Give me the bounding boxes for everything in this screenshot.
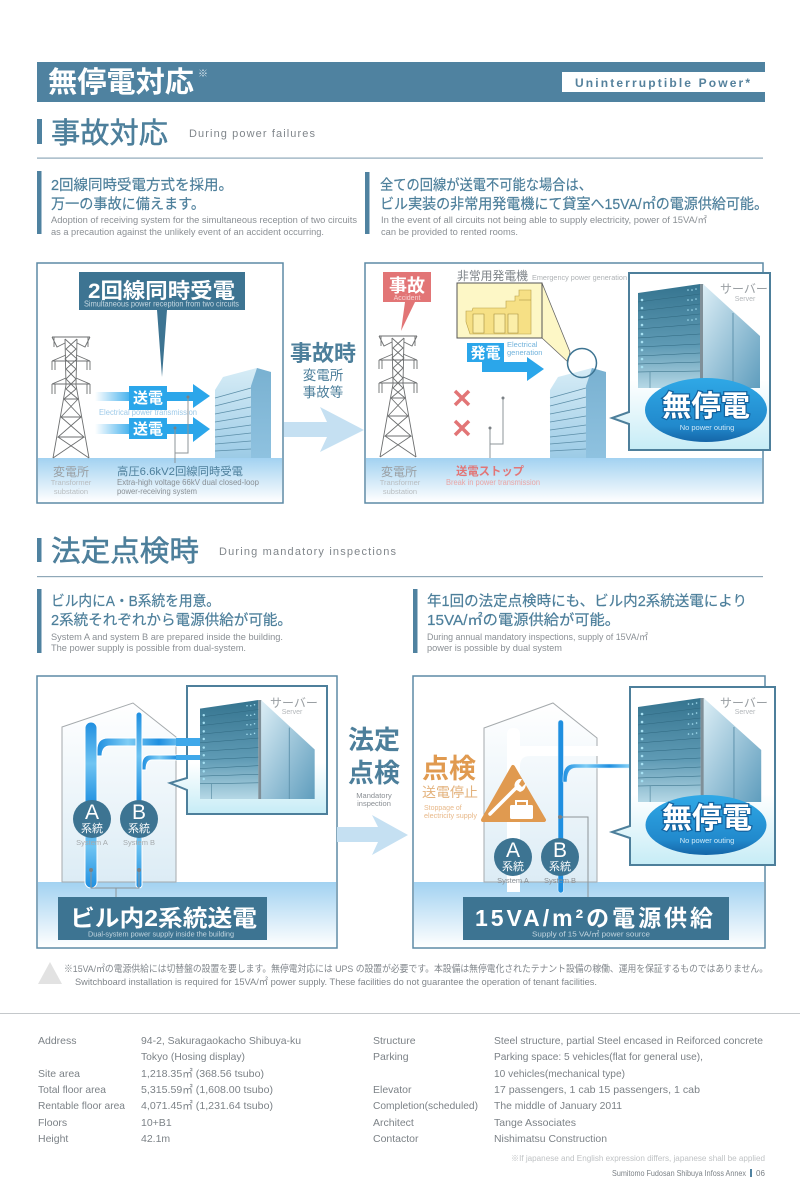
label: server: Server xyxy=(282,709,303,716)
spec table: left column: Height xyxy=(38,1133,68,1145)
panel: server xyxy=(170,686,327,814)
label: inspection: 送電停止 xyxy=(422,785,478,800)
icon: transmission tower xyxy=(52,337,90,458)
label: transformer substation xyxy=(51,464,92,496)
label: server: サーバー xyxy=(270,696,318,710)
spec table: right column: The middle of January 2011 xyxy=(494,1100,622,1112)
spec table: right column: Architect xyxy=(373,1117,414,1129)
badge: system A: 系統 xyxy=(502,859,524,873)
icon: generator zoom box xyxy=(457,283,570,362)
label: break in transmission: 送電ストップ xyxy=(456,464,524,478)
badge: system A: System A xyxy=(76,838,108,847)
callout: simultaneous reception xyxy=(79,272,245,377)
text block: two circuit reception: as a precaution against the unlikely event of an accident occurring. xyxy=(51,227,324,237)
connector lines xyxy=(488,396,504,458)
footer notes: Sumitomo Fudosan Shibuya Infoss Annex xyxy=(612,1169,746,1178)
spec table: right column: Contactor xyxy=(373,1133,419,1145)
spec table: right column: Completion(scheduled) xyxy=(373,1100,478,1112)
label: inspection: electricity supply xyxy=(424,813,478,820)
text block: emergency generator supply: can be provided to rented rooms. xyxy=(381,227,518,237)
arrow: generated power: 発電 xyxy=(470,344,501,362)
banner: 15VA power supply xyxy=(463,897,729,940)
label: inspection xyxy=(422,754,478,820)
spec table: left column: 94-2, Sakuragaokacho Shibuya-ku xyxy=(141,1035,301,1047)
spec table: left column: 42.1m xyxy=(141,1133,170,1145)
spec table: right column: Parking space: 5 vehicles(flat for general use), xyxy=(494,1051,703,1063)
spec table: left column: Tokyo (Hosing display) xyxy=(141,1051,245,1063)
panel: accident, emergency generation xyxy=(365,263,770,503)
badge: no power outage: No power outing xyxy=(680,423,734,432)
label: high voltage system xyxy=(117,464,260,496)
connector lines xyxy=(89,868,141,897)
English title tag: Uninterruptible Power* xyxy=(575,76,750,90)
callout: accident xyxy=(383,272,431,331)
text block: two circuit reception: 万一の事故に備えます。 xyxy=(51,196,205,213)
section heading: during power failures xyxy=(37,117,763,159)
arrow with label: mandatory inspection: Mandatory xyxy=(356,791,392,800)
banner: dual-system supply: ビル内2系統送電 xyxy=(70,905,257,931)
callout: accident: Accident xyxy=(394,295,420,302)
icon: transmission tower xyxy=(379,336,417,457)
label: inspection: 点検 xyxy=(422,754,476,784)
callout: simultaneous reception: Simultaneous power reception from two circuits xyxy=(84,300,239,308)
badge: system B: System B xyxy=(123,838,155,847)
spec table: left column: Address xyxy=(38,1035,77,1047)
arrow with label: at time of accident: 事故時 xyxy=(290,341,356,366)
icon: inspection warning triangle xyxy=(483,767,544,820)
panel: dual-system supply inside building xyxy=(37,676,337,948)
title text: 無停電対応 xyxy=(48,66,194,99)
panel: server, no power outage xyxy=(612,687,775,865)
text block: two circuit reception xyxy=(37,171,358,237)
badge: system A xyxy=(73,800,111,847)
text block: annual inspection supply: During annual mandatory inspections, supply of 15VA/㎡ xyxy=(427,632,648,642)
label: emergency power generator: Emergency power generation xyxy=(532,273,627,282)
icon: building xyxy=(215,368,271,458)
arrow: transmission upper xyxy=(95,384,210,410)
title note mark: ※ xyxy=(198,69,208,80)
label: transformer substation: substation xyxy=(383,487,417,496)
text block: annual inspection supply: 年1回の法定点検時にも、ビル内2系統送電により xyxy=(427,593,747,610)
badge: no power outage: No power outing xyxy=(680,836,734,845)
arrow: transmission upper: 送電 xyxy=(133,390,163,407)
icon: server rack xyxy=(200,700,315,799)
badge: no power outage: 無停電 xyxy=(662,390,750,423)
label: transformer substation xyxy=(380,464,421,496)
text block: emergency generator supply: In the event of all circuits not being able to supply electricity, power of 15VA/㎡ xyxy=(381,215,707,225)
spec table: left column: Rentable floor area xyxy=(38,1100,125,1112)
divider xyxy=(0,1013,800,1014)
power line: active system B xyxy=(558,720,640,893)
badge: system B: B xyxy=(132,801,146,824)
text block: two circuit reception: 2回線同時受電方式を採用。 xyxy=(51,177,233,194)
banner: 15VA power supply: 15VA/m²の電源供給 xyxy=(475,905,713,931)
label: electrical power transmission: Electrical power transmission xyxy=(99,408,197,417)
label: high voltage system: 高圧6.6kV2回線同時受電 xyxy=(117,464,243,478)
spec table: right column: Tange Associates xyxy=(494,1117,576,1129)
badge: no power outage: 無停電 xyxy=(662,802,752,835)
label: server: サーバー xyxy=(720,696,768,710)
panel: 15VA supply during inspection xyxy=(413,676,775,948)
label: transformer substation: 変電所 xyxy=(381,464,417,479)
power lines: system A xyxy=(85,722,200,888)
callout: accident: 事故 xyxy=(389,276,425,296)
text block: emergency generator supply xyxy=(365,172,768,237)
footnote with warning icon xyxy=(38,962,768,988)
label: high voltage system: Extra-high voltage 66kV dual closed-loop xyxy=(117,478,260,487)
spec table: left column: 10+B1 xyxy=(141,1117,172,1129)
label: emergency power generator: 非常用発電機 xyxy=(457,269,528,283)
icon: zoom circle xyxy=(568,348,596,378)
arrow with label: mandatory inspection xyxy=(337,725,408,855)
spec table: right column: 17 passengers, 1 cab 15 passengers, 1 cab xyxy=(494,1084,700,1096)
arrow: transmission lower xyxy=(95,417,210,442)
badge: system B xyxy=(541,838,579,885)
label: break in transmission: Break in power transmission xyxy=(446,478,540,487)
arrow with label: at time of accident: 事故等 xyxy=(303,384,343,400)
section heading: during mandatory inspections: During mandatory inspections xyxy=(219,546,396,558)
section heading: during mandatory inspections xyxy=(37,535,763,577)
text block: emergency generator supply: ビル実装の非常用発電機にて貸室へ15VA/㎡の電源供給可能。 xyxy=(380,196,768,213)
arrow with label: mandatory inspection: 点検 xyxy=(348,758,400,788)
text block: emergency generator supply: 全ての回線が送電不可能な場合は、 xyxy=(380,177,592,194)
footnote with warning icon: Switchboard installation is required for 15VA/㎡ power supply. These facilities do not guarantee the operation of tenant facilities. xyxy=(75,977,597,988)
banner: dual-system supply: Dual-system power supply inside the building xyxy=(88,930,234,938)
connector lines xyxy=(558,815,588,897)
English title tag xyxy=(562,72,765,92)
text block: annual inspection supply: 15VA/㎡の電源供給が可能。 xyxy=(427,612,620,629)
badge: system A: A xyxy=(506,839,520,862)
badge: system B: System B xyxy=(544,876,576,885)
label: high voltage system: power-receiving system xyxy=(117,487,197,496)
label: server xyxy=(720,282,768,303)
badge: system A: System A xyxy=(497,876,529,885)
badge: no power outage xyxy=(645,378,767,442)
footer notes: 06 xyxy=(756,1169,765,1178)
arrow: generated power xyxy=(467,340,544,381)
arrow with label: mandatory inspection: 法定 xyxy=(348,725,400,755)
badge: system B: 系統 xyxy=(549,859,571,873)
spec table: right column: Steel structure, partial Steel encased in Reiforced concrete xyxy=(494,1035,763,1047)
title banner xyxy=(37,62,765,102)
text block: annual inspection supply xyxy=(413,589,747,653)
spec table: right column: Nishimatsu Construction xyxy=(494,1133,607,1145)
icon: server rack xyxy=(638,284,760,388)
footer notes xyxy=(511,1154,765,1178)
text block: annual inspection supply: power is possible by dual system xyxy=(427,643,562,653)
label: server: Server xyxy=(735,709,756,716)
spec table: right column: Elevator xyxy=(373,1084,412,1096)
spec table: right column: Structure xyxy=(373,1035,416,1047)
text block: systems A and B: 2系統それぞれから電源供給が可能。 xyxy=(51,612,292,629)
badge: system B: B xyxy=(553,839,567,862)
spec table: right column: Parking xyxy=(373,1051,409,1063)
icon: cross upper xyxy=(455,391,469,405)
label: emergency power generator xyxy=(457,269,627,283)
spec table: left column xyxy=(38,1035,301,1145)
footer notes: ※If japanese and English expression differs, japanese shall be applied xyxy=(511,1154,765,1163)
label: inspection: Stoppage of xyxy=(424,805,462,812)
icon: building xyxy=(550,368,606,458)
label: transformer substation: Transformer xyxy=(380,478,421,487)
power line: stopped system A xyxy=(507,728,628,892)
section heading: during power failures: During power failures xyxy=(189,128,316,140)
spec table: left column: 1,218.35㎡ (368.56 tsubo) xyxy=(141,1068,264,1080)
connector lines xyxy=(174,396,190,463)
building outline xyxy=(62,703,176,882)
icon: cross lower xyxy=(455,421,469,435)
text block: systems A and B: The power supply is possible from dual-system. xyxy=(51,643,246,653)
arrow with label: at time of accident: 変電所 xyxy=(303,368,344,383)
label: transformer substation: substation xyxy=(54,487,88,496)
badge: system B xyxy=(120,800,158,847)
panel: server, no power outage xyxy=(612,273,770,450)
icon: server rack xyxy=(638,698,761,802)
section heading: during mandatory inspections: 法定点検時 xyxy=(51,535,199,568)
label: server: Server xyxy=(735,296,756,303)
label: server: サーバー xyxy=(720,282,768,296)
arrow: generated power: generation xyxy=(507,348,542,357)
text block: systems A and B: ビル内にA・B系統を用意。 xyxy=(51,593,220,610)
spec table: right column xyxy=(373,1035,763,1145)
spec table: left column: Floors xyxy=(38,1117,67,1129)
spec table: left column: Site area xyxy=(38,1068,80,1080)
power lines: system B xyxy=(136,712,200,888)
callout: simultaneous reception: 2回線同時受電 xyxy=(88,280,235,303)
spec table: left column: 4,071.45㎡ (1,231.64 tsubo) xyxy=(141,1100,273,1112)
badge: system A: 系統 xyxy=(81,821,103,835)
arrow: transmission lower: 送電 xyxy=(133,421,163,438)
text block: systems A and B: System A and system B are prepared inside the building. xyxy=(51,632,283,642)
arrow: generated power: Electrical xyxy=(507,340,538,349)
building outline xyxy=(484,703,597,882)
text block: two circuit reception: Adoption of receiving system for the simultaneous reception of two circuits xyxy=(51,215,358,225)
badge: system A xyxy=(494,838,532,885)
badge: system B: 系統 xyxy=(128,821,150,835)
label: transformer substation: Transformer xyxy=(51,478,92,487)
icon: warning triangle xyxy=(38,962,62,984)
arrow with label: mandatory inspection: inspection xyxy=(357,799,391,808)
banner: 15VA power supply: Supply of 15 VA/㎡ power source xyxy=(532,930,650,938)
label: transformer substation: 変電所 xyxy=(53,464,89,479)
section heading: during power failures: 事故対応 xyxy=(51,117,168,150)
badge: no power outage xyxy=(646,795,766,855)
spec table: right column: 10 vehicles(mechanical type) xyxy=(494,1068,625,1080)
power line ends entering server xyxy=(176,738,200,760)
label: break in transmission xyxy=(446,464,540,487)
panel: normal two-circuit reception xyxy=(37,263,283,503)
spec table: left column: 5,315.59㎡ (1,608.00 tsubo) xyxy=(141,1084,273,1096)
text block: systems A and B xyxy=(37,589,292,653)
arrow with label: at time of accident xyxy=(284,341,364,452)
banner: dual-system supply xyxy=(58,897,267,940)
spec table: left column: Total floor area xyxy=(38,1084,106,1096)
badge: system A: A xyxy=(85,801,99,824)
